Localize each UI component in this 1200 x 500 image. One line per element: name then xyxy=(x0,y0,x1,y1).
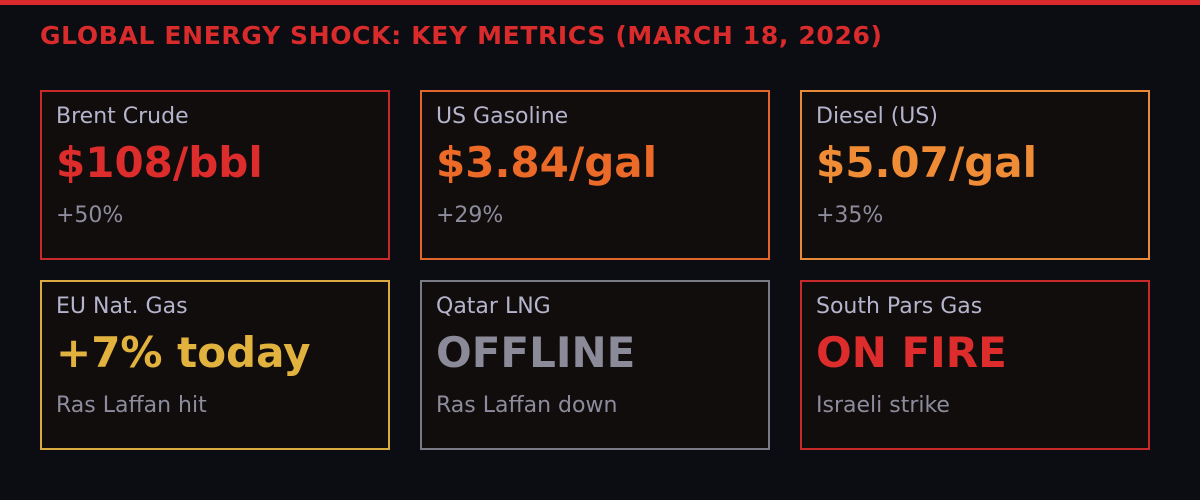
card: Brent Crude: $108/bbl xyxy=(56,138,263,187)
card: Diesel: +35% xyxy=(816,203,883,228)
card: EU Nat Gas: EU Nat. Gas xyxy=(56,294,188,319)
card: EU Nat Gas: Ras Laffan hit xyxy=(56,393,207,418)
card: EU Nat Gas: +7% today xyxy=(56,328,311,377)
title: GLOBAL ENERGY SHOCK: KEY METRICS (MARCH 18, 2026) xyxy=(40,21,883,50)
card: US Gasoline xyxy=(420,90,770,260)
card: US Gasoline: +29% xyxy=(436,203,503,228)
card: Qatar LNG: Qatar LNG xyxy=(436,294,551,319)
card: US Gasoline: $3.84/gal xyxy=(436,138,657,187)
card: South Pars: South Pars Gas xyxy=(816,294,982,319)
card: EU Nat Gas xyxy=(40,280,390,450)
card: Diesel: Diesel (US) xyxy=(816,104,938,129)
card: Brent Crude xyxy=(40,90,390,260)
card: South Pars xyxy=(800,280,1150,450)
card: Qatar LNG: OFFLINE xyxy=(436,328,635,377)
card: Qatar LNG xyxy=(420,280,770,450)
card: South Pars: ON FIRE xyxy=(816,328,1007,377)
card: Diesel xyxy=(800,90,1150,260)
card: South Pars: Israeli strike xyxy=(816,393,950,418)
card: Brent Crude: Brent Crude xyxy=(56,104,189,129)
card: Diesel: $5.07/gal xyxy=(816,138,1037,187)
card: Brent Crude: +50% xyxy=(56,203,123,228)
card: Qatar LNG: Ras Laffan down xyxy=(436,393,617,418)
card: US Gasoline: US Gasoline xyxy=(436,104,568,129)
